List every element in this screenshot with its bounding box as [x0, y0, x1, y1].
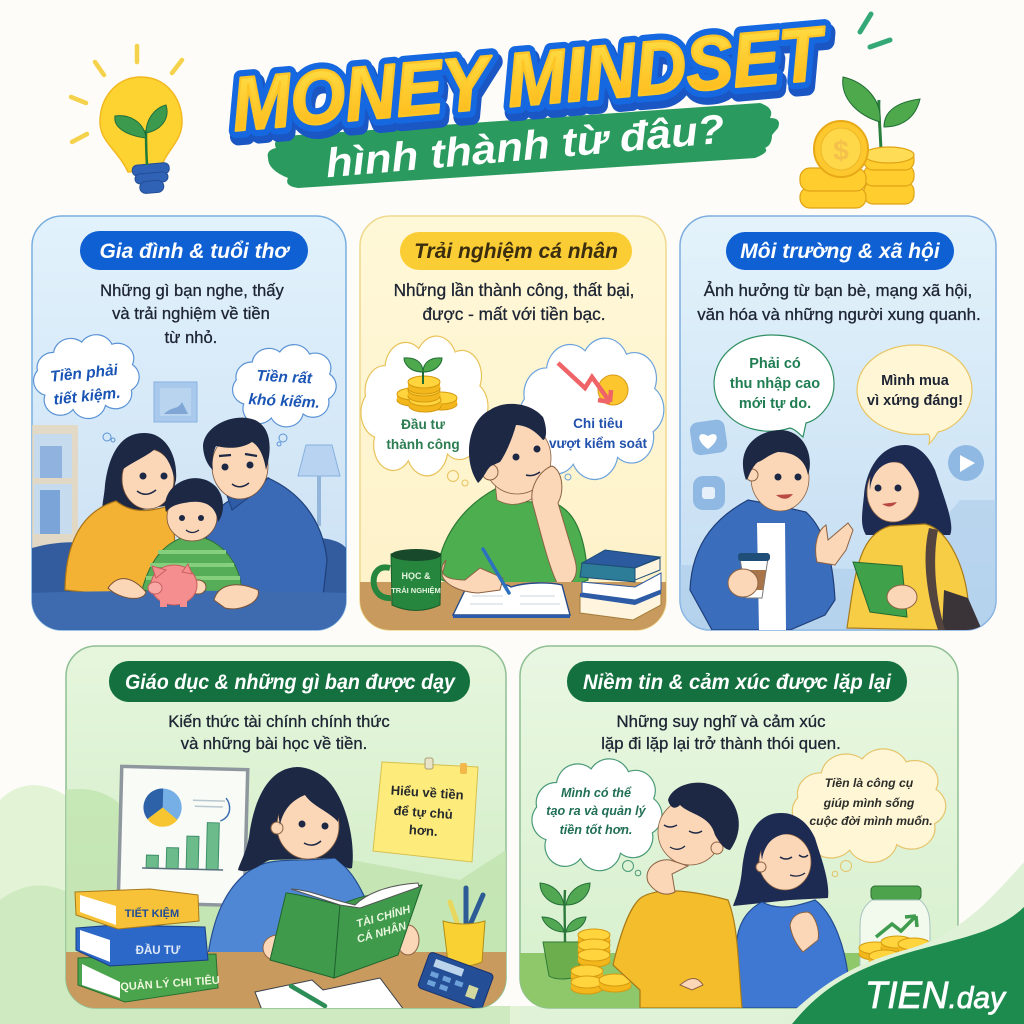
icon: coins and sprout: $	[833, 135, 849, 166]
illustration: mother	[65, 433, 176, 597]
description	[394, 280, 634, 324]
title: MONEY MINDSET: MONEY MINDSET	[231, 17, 833, 153]
illustration: writing hand	[442, 560, 503, 593]
pill heading: Giáo dục & những gì bạn được dạy	[125, 671, 456, 694]
thought bubble: overspending: vượt kiểm soát	[549, 436, 648, 451]
description: được - mất với tiền bạc.	[422, 304, 606, 324]
background foliage	[680, 500, 996, 630]
description: từ nhỏ.	[165, 328, 217, 347]
description: Những gì bạn nghe, thấy	[100, 281, 285, 300]
speech bubble: high income	[714, 335, 834, 437]
thought bubble: money as tool	[792, 749, 946, 877]
description: Những suy nghĩ và cảm xúc	[617, 712, 825, 731]
illustration: lamp	[298, 445, 340, 526]
description: Ảnh hưởng từ bạn bè, mạng xã hội,	[704, 281, 972, 300]
pill heading: Trải nghiệm cá nhân	[414, 240, 618, 263]
description: Kiến thức tài chính chính thức	[168, 712, 390, 731]
background hills	[0, 785, 958, 1024]
icon: heart	[689, 419, 728, 456]
illustration: picture frame	[154, 382, 197, 422]
pill heading: Niềm tin & cảm xúc được lặp lại	[583, 671, 892, 694]
icon: stacked books: QUẢN LÝ CHI TIÊU	[120, 974, 220, 993]
icon: dashes	[860, 14, 890, 47]
illustration: table	[66, 952, 506, 1008]
icon: coins with sprout	[397, 358, 457, 412]
description	[168, 712, 390, 753]
pill heading: Môi trường & xã hội	[740, 240, 941, 263]
thought bubble: self belief: tiền tốt hơn.	[560, 823, 632, 837]
pill heading	[109, 661, 470, 702]
thought bubble: self belief: Mình có thể	[561, 786, 632, 800]
thought bubble: money as tool: cuộc đời mình muốn.	[809, 814, 933, 828]
icon: mug: HỌC &	[402, 571, 431, 581]
pill heading	[567, 661, 907, 702]
sticky note	[373, 758, 478, 862]
background foliage	[66, 789, 506, 960]
thought bubble: money as tool: giúp mình sống	[823, 796, 915, 810]
subtitle: hình thành từ đâu?: hình thành từ đâu?	[324, 106, 726, 186]
icon: open notebook with pen	[255, 978, 404, 1010]
speech bubble: high income: Phải có	[749, 356, 801, 372]
illustration: woman reading	[207, 767, 368, 965]
description: và những bài học về tiền.	[181, 734, 367, 753]
illustration: whiteboard with charts	[118, 766, 248, 906]
thought bubble: investment success: thành công	[386, 437, 460, 452]
thought bubble: investment success: Đầu tư	[401, 417, 445, 432]
speech bubble: worth it: Mình mua	[881, 373, 950, 389]
illustration: table	[32, 590, 346, 630]
pill heading: Gia đình & tuổi thơ	[99, 240, 290, 263]
icon: stacked books	[75, 889, 220, 1002]
illustration: young man	[436, 404, 588, 590]
panel: Giáo dục & những gì bạn được dạy	[66, 646, 506, 1010]
icon: stacked books	[580, 550, 661, 620]
illustration: hands on table	[108, 579, 258, 609]
thought bubble: money as tool: Tiền là công cụ	[825, 776, 914, 790]
icon: mug: TRẢI NGHIỆM	[391, 586, 441, 595]
illustration: bookshelf	[32, 425, 78, 550]
description	[697, 281, 981, 324]
pill heading	[726, 232, 954, 270]
speech bubble: high income: thu nhập cao	[730, 376, 820, 392]
logo: TIEN.day corner	[780, 862, 1024, 1024]
speech bubble: high income: mới tự do.	[739, 396, 811, 412]
sticky note: Hiểu về tiền	[390, 782, 464, 803]
description: lặp đi lặp lại trở thành thói quen.	[601, 734, 841, 753]
illustration: hands	[263, 925, 419, 961]
icon: stacked books: TIẾT KIỆM	[125, 907, 179, 920]
thought bubble: overspending: Chi tiêu	[573, 416, 623, 431]
description: văn hóa và những người xung quanh.	[697, 305, 981, 324]
panel: Môi trường & xã hội	[680, 216, 996, 630]
icon: green book: CÁ NHÂN	[355, 919, 409, 946]
icon: video	[693, 476, 725, 510]
icon: play	[948, 445, 984, 481]
description	[100, 281, 285, 347]
icon: potted plant	[540, 883, 590, 979]
thought bubble: left: tiết kiệm.	[53, 385, 121, 409]
bar chart	[146, 821, 219, 870]
illustration: open book	[453, 583, 570, 618]
speech bubble: worth it	[857, 345, 972, 444]
icon: gold coins	[571, 929, 631, 994]
panel: Niềm tin & cảm xúc được lặp lại	[520, 646, 958, 1009]
illustration: woman	[733, 813, 848, 1008]
thought bubble: self belief	[532, 759, 662, 876]
pill heading	[400, 232, 632, 270]
title: MONEY MINDSET: MONEY MINDSET	[229, 11, 831, 148]
illustration: father	[203, 418, 328, 592]
icon: stacked books: ĐẦU TƯ	[136, 944, 181, 957]
panel: Gia đình & tuổi thơ	[32, 216, 346, 640]
icon: light bulb with sprout	[71, 46, 182, 194]
pill heading	[80, 231, 308, 270]
icon: savings jar	[859, 886, 930, 975]
icon: coins and sprout	[800, 77, 920, 208]
illustration: child	[142, 478, 242, 600]
speech bubble: worth it: vì xứng đáng!	[867, 393, 963, 409]
thought bubble: investment success	[361, 336, 488, 486]
illustration: floor	[520, 953, 958, 1009]
illustration: sofa	[32, 538, 346, 640]
description	[601, 712, 841, 753]
icon: mug	[374, 549, 441, 610]
description: Những lần thành công, thất bại,	[394, 280, 634, 300]
subtitle banner shape	[268, 103, 779, 188]
illustration: woman	[847, 445, 982, 630]
icon: green book: TÀI CHÍNH	[355, 902, 413, 931]
thought bubble: right: khó kiếm.	[248, 391, 320, 412]
icon: piggy bank	[148, 564, 197, 607]
illustration: table	[360, 582, 666, 630]
illustration: man	[613, 783, 742, 1008]
thought bubble: right: Tiền rất	[256, 368, 313, 387]
sticky note: để tự chủ	[393, 803, 453, 822]
icon: falling arrow and coin	[558, 363, 628, 405]
icon: pen	[483, 549, 509, 593]
thought bubble: right	[233, 345, 336, 446]
thought bubble: left: Tiền phải	[50, 362, 119, 386]
thought bubble: self belief: tạo ra và quản lý	[546, 804, 647, 818]
icon: green book	[270, 883, 422, 978]
icon: pencil cup	[443, 888, 485, 966]
logo: TIEN.day corner: TIEN.day	[865, 975, 1007, 1017]
illustration: man	[690, 430, 853, 630]
description: và trải nghiệm về tiền	[112, 304, 270, 323]
thought bubble: overspending	[519, 338, 664, 480]
thought bubble: left	[34, 335, 139, 442]
icon: coffee cup	[728, 553, 770, 598]
panel: Trải nghiệm cá nhân	[360, 216, 666, 640]
icon: calculator	[417, 951, 494, 1010]
pie chart	[143, 788, 182, 827]
title: MONEY MINDSET: MONEY MINDSET	[229, 11, 831, 148]
sticky note: hơn.	[408, 822, 438, 839]
